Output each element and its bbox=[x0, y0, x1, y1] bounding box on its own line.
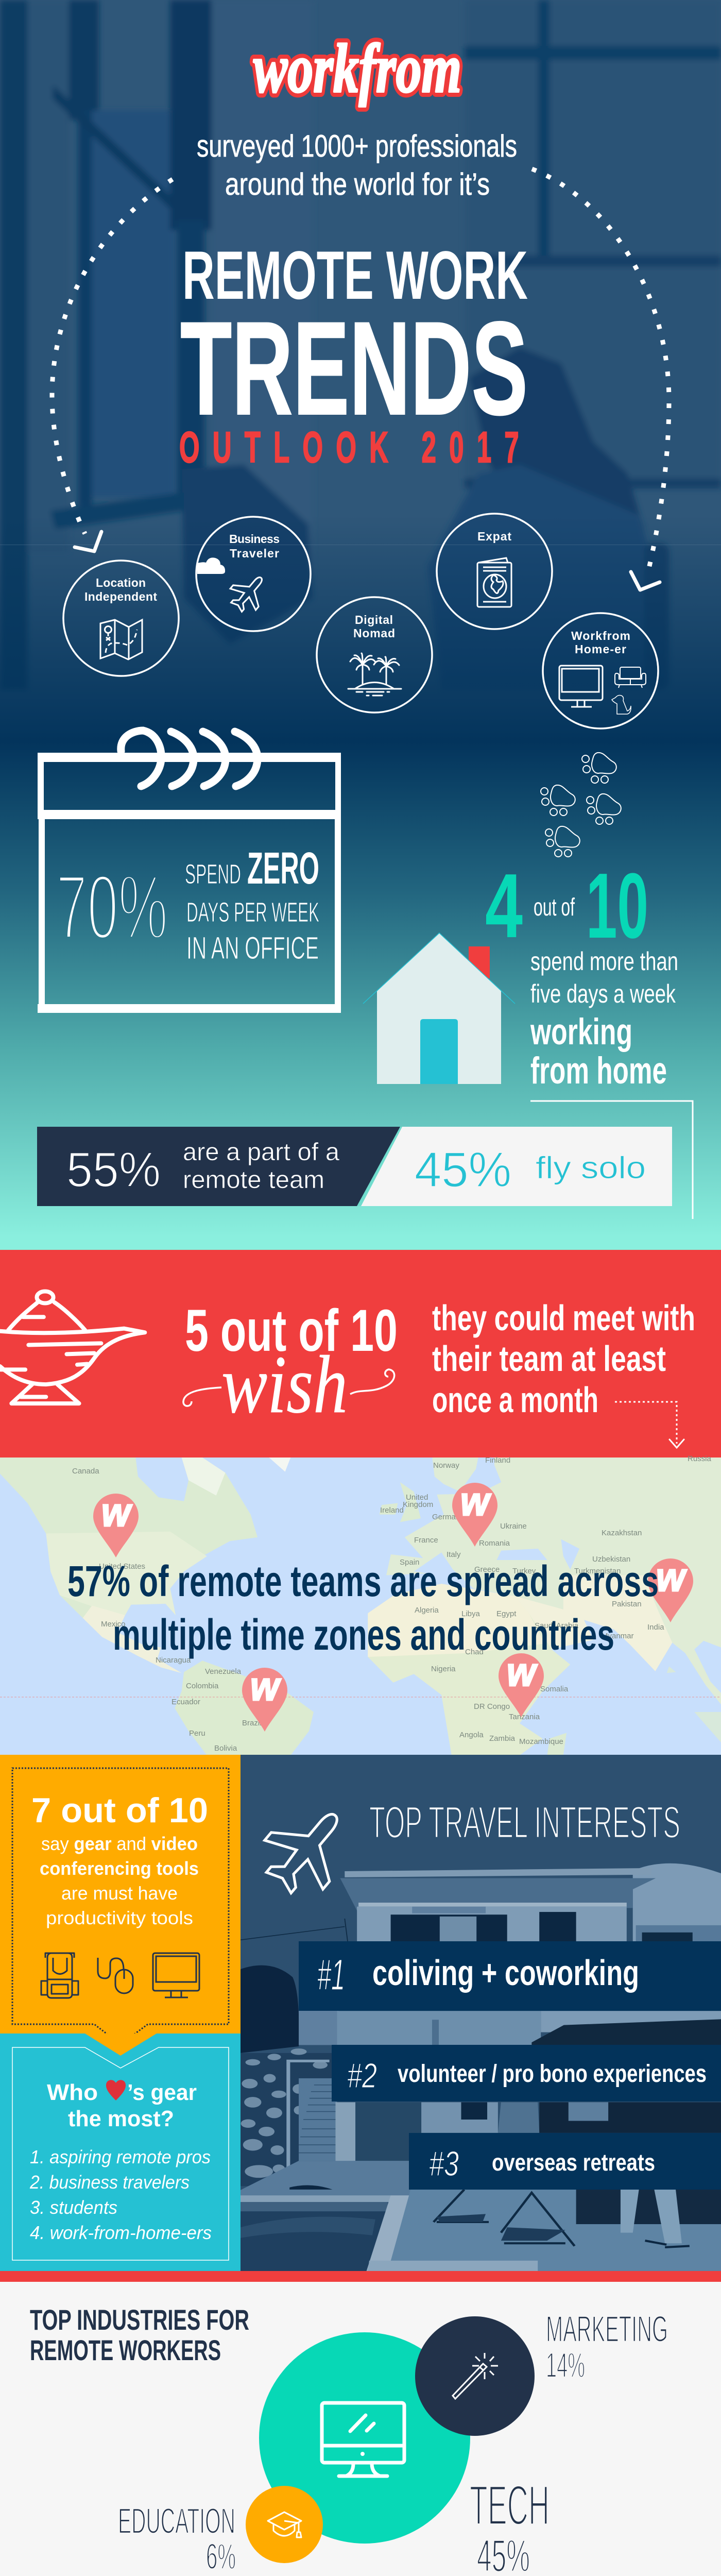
pin: asia bbox=[648, 1554, 693, 1622]
panel: who loves gear teal bbox=[0, 2033, 241, 2271]
map place labels bbox=[72, 1454, 712, 1753]
calendar binder rings bbox=[121, 731, 258, 786]
icon: calendar with stat bbox=[38, 731, 341, 1013]
text: spend zero days per week in an office: DAYS PER WEEK bbox=[186, 897, 319, 928]
text: survey intro bbox=[197, 129, 517, 201]
map place labels: Chad bbox=[465, 1648, 484, 1656]
map place labels: Tanzania bbox=[509, 1713, 540, 1721]
text: spend more than five days a week working from home bbox=[530, 947, 678, 1092]
stat: 45% fly solo bbox=[415, 1142, 646, 1197]
map place labels: United States bbox=[99, 1562, 145, 1571]
icon: folded map bbox=[100, 620, 142, 659]
text: survey intro: surveyed 1000+ professionals bbox=[197, 129, 517, 163]
interest: volunteer / pro bono bbox=[332, 2045, 721, 2102]
icon: desktop monitor bbox=[153, 1953, 199, 1997]
text: survey intro: around the world for it’s bbox=[225, 167, 490, 201]
interest: overseas retreats: #3 bbox=[429, 2144, 459, 2183]
panel: top travel interests bbox=[241, 1755, 721, 2272]
text: gear and video conferencing tools: say gear and video bbox=[41, 1833, 198, 1854]
map place labels: Peru bbox=[189, 1729, 205, 1738]
stat: 4 out of 10: out of bbox=[534, 894, 575, 921]
icon: monitor bbox=[322, 2403, 404, 2476]
stat: 4 out of 10: 4 bbox=[485, 855, 523, 957]
heading: who hearts gear the most: Who bbox=[47, 2080, 98, 2105]
pin: north america: w bbox=[101, 1489, 132, 1535]
stat: 45% fly solo: 45% bbox=[415, 1142, 511, 1197]
pin: north america bbox=[93, 1489, 139, 1557]
panel: gear stat orange bbox=[0, 1755, 241, 2044]
map place labels: Ireland bbox=[380, 1506, 404, 1515]
arrow: dotted down arrow bbox=[615, 1402, 684, 1448]
map place labels: Greece bbox=[474, 1565, 500, 1574]
panel: hero and stats gradient background bbox=[0, 0, 721, 1252]
stat: 55% remote team: are a part of a bbox=[183, 1139, 339, 1166]
pin: europe: w bbox=[460, 1479, 491, 1524]
map place labels: Italy bbox=[447, 1550, 461, 1559]
map land masses bbox=[0, 1458, 721, 1755]
map place labels: Libya bbox=[461, 1609, 480, 1618]
map place labels: Uzbekistan bbox=[592, 1555, 630, 1564]
pin: south america bbox=[242, 1664, 287, 1732]
icon: palm island bbox=[348, 653, 401, 696]
panel: top industries bbox=[0, 2271, 721, 2576]
map place labels: Spain bbox=[400, 1558, 419, 1567]
pin: africa bbox=[499, 1649, 544, 1717]
text: spend more than five days a week working from home: spend more than bbox=[530, 947, 678, 976]
map place labels: Romania bbox=[479, 1539, 510, 1548]
stat: 45% fly solo: fly solo bbox=[536, 1150, 646, 1185]
panel: world map bbox=[0, 1454, 721, 1755]
bubble: education bbox=[246, 2486, 323, 2563]
map place labels: Pakistan bbox=[612, 1600, 642, 1608]
script text: wish with flourish: wish bbox=[221, 1338, 348, 1430]
persona: workfrom home-er: Workfrom bbox=[571, 629, 630, 642]
text: spend more than five days a week working from home: from home bbox=[530, 1050, 667, 1092]
map place labels: Mexico bbox=[101, 1620, 126, 1629]
arrow: dotted right arc bbox=[532, 169, 669, 590]
heading: who hearts gear the most: the most? bbox=[68, 2106, 174, 2131]
map place labels: Myanmar bbox=[602, 1632, 634, 1640]
persona: business traveler: Traveler bbox=[230, 547, 279, 560]
text: gear and video conferencing tools bbox=[40, 1833, 199, 1928]
photo: villa and pool bbox=[241, 1863, 721, 2272]
text: spend more than five days a week working from home: working bbox=[530, 1012, 632, 1053]
icon: computer mouse bbox=[98, 1958, 133, 1993]
heading: top industries for remote workers: TOP INDUSTRIES FOR bbox=[30, 2303, 249, 2336]
icon: genie lamp bbox=[0, 1292, 145, 1403]
map place labels: Angola bbox=[459, 1731, 484, 1739]
map place labels: Zambia bbox=[489, 1734, 516, 1743]
persona: location independent: Location bbox=[96, 576, 146, 589]
stat: 70%: 70% bbox=[56, 856, 168, 958]
panel: team vs solo bar bbox=[37, 1127, 672, 1206]
map place labels: Venezuela bbox=[205, 1667, 242, 1676]
map place labels: Bolivia bbox=[214, 1744, 237, 1753]
label: marketing 14% bbox=[546, 2309, 668, 2385]
text: gear and video conferencing tools: are must have bbox=[61, 1883, 178, 1904]
title: remote work trends outlook 2017: REMOTE WORK bbox=[182, 238, 528, 314]
persona: business traveler bbox=[196, 517, 311, 631]
text: spend zero days per week in an office: IN AN OFFICE bbox=[186, 930, 319, 965]
persona: location independent bbox=[63, 561, 179, 676]
map place labels: France bbox=[414, 1536, 438, 1545]
text: spend more than five days a week working from home: five days a week bbox=[530, 979, 676, 1008]
persona: expat bbox=[437, 514, 552, 629]
map place labels: Ecuador bbox=[171, 1698, 200, 1706]
title: remote work trends outlook 2017: TRENDS bbox=[180, 294, 528, 443]
persona: workfrom home-er: Home-er bbox=[575, 642, 626, 656]
map place labels: Turkmenistan bbox=[574, 1567, 621, 1575]
list: who loves gear: 2. business travelers bbox=[29, 2172, 190, 2193]
heading: top industries for remote workers bbox=[30, 2303, 249, 2366]
panel: wish banner bbox=[0, 1250, 721, 1458]
stat: 5 out of 10: 5 out of 10 bbox=[185, 1298, 398, 1364]
list: who loves gear: 3. students bbox=[30, 2197, 117, 2218]
text: spend zero days per week in an office: ZERO bbox=[247, 843, 319, 893]
arrow: dotted left arc bbox=[52, 179, 173, 551]
map equator bbox=[0, 1697, 721, 1698]
label: education 6%: EDUCATION bbox=[118, 2501, 235, 2541]
text: gear and video conferencing tools: productivity tools bbox=[46, 1907, 193, 1928]
interest: coliving + coworking: #1 bbox=[317, 1951, 345, 1999]
text: spend zero days per week in an office bbox=[185, 843, 319, 965]
title: remote work trends outlook 2017 bbox=[179, 238, 532, 471]
logo: workfrom: workfrom bbox=[253, 30, 461, 107]
list: who loves gear bbox=[29, 2146, 212, 2243]
stat: 4 out of 10 bbox=[485, 854, 648, 958]
pin: europe bbox=[452, 1479, 497, 1547]
text: they could meet with their team bbox=[432, 1298, 695, 1420]
icon: passport bbox=[477, 558, 511, 607]
map place labels: Norway bbox=[433, 1461, 459, 1470]
interest: volunteer / pro bono: #2 bbox=[347, 2056, 377, 2095]
interest: coliving + coworking bbox=[299, 1941, 721, 2011]
heading: who hearts gear the most: ’s gear bbox=[127, 2080, 197, 2105]
map place labels: Germany bbox=[432, 1513, 464, 1521]
icon: graduation cap bbox=[268, 2512, 301, 2537]
icon: magic wand bbox=[453, 2353, 498, 2399]
text: 57% of remote teams bbox=[67, 1557, 659, 1659]
map place labels: Brazil bbox=[242, 1719, 262, 1727]
label: education 6%: 6% bbox=[206, 2536, 236, 2576]
map place labels: Kingdom bbox=[403, 1500, 433, 1509]
label: marketing 14%: 14% bbox=[546, 2346, 585, 2385]
map place labels: Egypt bbox=[496, 1609, 517, 1618]
pin: south america: w bbox=[250, 1664, 281, 1709]
icon: cloud bbox=[197, 557, 225, 574]
map place labels: Finland bbox=[485, 1456, 510, 1465]
bubble: marketing bbox=[415, 2316, 535, 2436]
pin: asia: w bbox=[656, 1554, 687, 1600]
list: who loves gear: 4. work-from-home-ers bbox=[30, 2222, 212, 2243]
text: they could meet with their team: once a month bbox=[432, 1380, 598, 1420]
stat: 55% remote team: remote team bbox=[183, 1166, 324, 1194]
persona: digital nomad: Digital bbox=[355, 613, 393, 626]
interest: coliving + coworking: coliving + coworking bbox=[372, 1953, 639, 1993]
text: spend zero days per week in an office: SPEND bbox=[185, 859, 241, 890]
list: who loves gear: 1. aspiring remote pros bbox=[30, 2146, 211, 2167]
persona: business traveler: Business bbox=[229, 532, 280, 546]
label: tech 45% bbox=[470, 2474, 550, 2576]
map place labels: DR Congo bbox=[474, 1702, 510, 1711]
heading: top industries for remote workers: REMOTE WORKERS bbox=[30, 2334, 221, 2366]
persona: digital nomad: Nomad bbox=[353, 626, 395, 640]
icon: backpack bbox=[41, 1953, 78, 1998]
map place labels: Nicaragua bbox=[156, 1656, 191, 1665]
label: tech 45%: TECH bbox=[470, 2474, 550, 2537]
stat: 55% remote team: 55% bbox=[66, 1142, 161, 1197]
map place labels: Algeria bbox=[415, 1606, 439, 1615]
map place labels: Saudi Arabia bbox=[535, 1621, 579, 1630]
interest: overseas retreats: overseas retreats bbox=[492, 2149, 655, 2176]
pin: africa: w bbox=[507, 1649, 538, 1694]
map place labels: Somalia bbox=[540, 1685, 569, 1693]
decorative bracket line bbox=[530, 1101, 693, 1219]
stat: 7 out of 10: 7 out of 10 bbox=[31, 1791, 208, 1830]
persona: digital nomad bbox=[317, 597, 432, 713]
map place labels: India bbox=[647, 1623, 664, 1632]
stat: 55% remote team bbox=[66, 1139, 339, 1197]
map place labels: United bbox=[406, 1493, 428, 1502]
text: gear and video conferencing tools: conferencing tools bbox=[40, 1858, 199, 1879]
map place labels: Colombia bbox=[186, 1682, 219, 1690]
map place labels: Russia bbox=[688, 1454, 712, 1463]
interest: overseas retreats bbox=[409, 2133, 721, 2190]
map place labels: Mozambique bbox=[519, 1737, 563, 1746]
map place labels: Nigeria bbox=[431, 1665, 456, 1673]
icon: airplane bbox=[224, 567, 274, 618]
persona: location independent: Independent bbox=[84, 590, 157, 603]
icon: monitor, sofa and dog bbox=[559, 666, 646, 714]
icon: paw prints bbox=[541, 753, 621, 857]
map place labels: Ukraine bbox=[500, 1522, 527, 1531]
heading: who hearts gear the most bbox=[47, 2080, 197, 2131]
map place labels: Kazakhstan bbox=[602, 1529, 642, 1537]
persona: expat: Expat bbox=[477, 530, 511, 543]
icon: house bbox=[363, 933, 515, 1084]
icon: large airplane bbox=[250, 1791, 364, 1907]
map place labels: Turkey bbox=[512, 1567, 536, 1575]
stat: 4 out of 10: 10 bbox=[586, 854, 648, 958]
bubble: tech bbox=[259, 2332, 470, 2544]
persona: workfrom home-er bbox=[543, 613, 658, 728]
label: education 6% bbox=[118, 2501, 236, 2576]
map place labels: Canada bbox=[72, 1467, 99, 1476]
logo: workfrom: workfrom bbox=[253, 30, 461, 107]
